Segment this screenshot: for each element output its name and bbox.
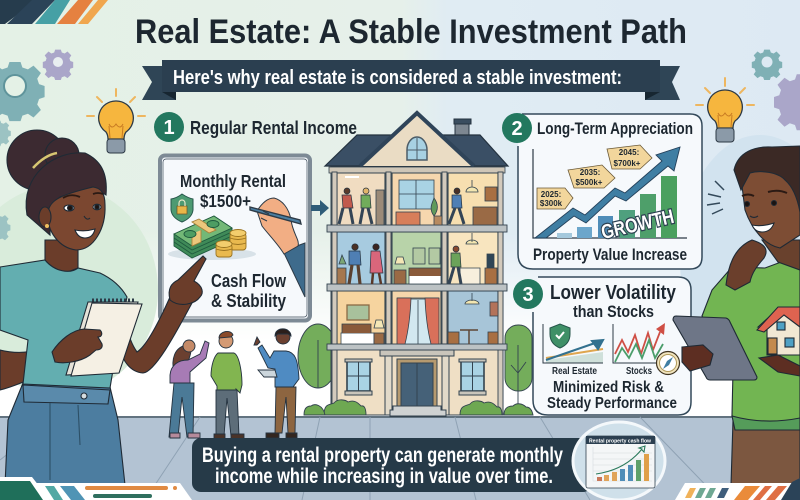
figure: woman with notepad — [0, 130, 206, 485]
cash flow badge — [573, 422, 665, 500]
number badge 2 — [502, 113, 532, 143]
panel: long-term appreciation — [502, 113, 702, 269]
cash flow text: & Stability — [211, 291, 286, 311]
floor — [0, 416, 800, 500]
number badge 1: 1 — [163, 117, 175, 139]
summary text — [202, 444, 563, 488]
hand on chin — [726, 240, 766, 290]
monthly rental text — [180, 171, 286, 211]
neck — [45, 240, 78, 275]
icon: shield — [171, 194, 193, 222]
price tag 2045 — [607, 145, 652, 169]
price tag 2035: $500k+ — [576, 178, 603, 187]
summary bar — [192, 422, 665, 500]
heading 2: Long-Term Appreciation — [537, 120, 693, 138]
icon: writing hand — [250, 198, 305, 297]
cash flow text: Cash Flow — [211, 271, 287, 291]
hair — [7, 130, 106, 235]
neck — [762, 240, 800, 270]
trousers — [731, 420, 800, 485]
house — [325, 113, 508, 416]
price tag 2025: 2025: — [541, 190, 561, 199]
banner text: Here's why real estate is considered a stable investment: — [173, 66, 622, 89]
title: Real Estate: A Stable Investment Path — [135, 13, 687, 51]
number badge 1 — [154, 112, 184, 142]
person: woman in purple — [169, 340, 209, 438]
notepad — [66, 300, 142, 376]
model house — [757, 307, 800, 355]
caption 3: Minimized Risk & — [553, 379, 664, 396]
t-shirt — [0, 260, 127, 388]
cash flow text — [211, 271, 287, 311]
residents — [339, 188, 464, 284]
bottom-left ornament — [0, 477, 192, 500]
rooms — [337, 173, 498, 344]
arrow to house — [311, 200, 329, 216]
sweater — [702, 255, 800, 430]
speech ticks — [707, 181, 724, 214]
price tag 2035 — [568, 165, 615, 188]
mini bar chart — [593, 446, 652, 481]
price tag 2045: 2045: — [619, 148, 639, 157]
growth arrow — [535, 147, 680, 238]
summary text: Buying a rental property can generate monthly — [202, 444, 563, 467]
growth label: GROWTH — [599, 206, 676, 244]
bushes — [304, 400, 533, 415]
price tag 2025: $300k — [540, 199, 563, 208]
hair — [734, 146, 800, 212]
gears left — [0, 50, 73, 242]
heading 3: Lower Volatility — [550, 282, 677, 304]
heading 3: than Stocks — [573, 302, 654, 321]
caption 2: Property Value Increase — [533, 246, 687, 264]
heading 1: Regular Rental Income — [190, 118, 357, 138]
icon: compass — [656, 352, 680, 374]
back arm — [0, 342, 70, 390]
banner — [142, 60, 680, 100]
fist — [169, 256, 206, 304]
hand on tablet — [682, 345, 713, 371]
hand on notepad — [52, 329, 102, 363]
card 3 — [533, 277, 691, 415]
real estate chart — [543, 324, 603, 363]
columns and floors — [327, 172, 507, 415]
chart labels — [552, 365, 652, 377]
facade — [327, 167, 507, 416]
chart labels: Real Estate — [552, 365, 597, 377]
price tag 2045: $700k+ — [614, 159, 641, 168]
ground floor — [345, 350, 486, 416]
cash flow badge: Rental property cash flow — [589, 438, 652, 444]
stocks chart — [613, 323, 665, 363]
backdrop circle behind man — [680, 135, 800, 385]
growth chart — [533, 145, 687, 244]
monthly rental text: $1500+ — [200, 191, 251, 211]
summary text: income while increasing in value over time. — [215, 465, 553, 488]
number badge 2: 2 — [511, 118, 523, 140]
card 1 — [160, 156, 310, 320]
panel: rental income — [154, 112, 357, 320]
card 2 — [518, 114, 702, 269]
small group of people — [169, 329, 299, 439]
backdrop circle behind woman — [0, 185, 158, 395]
number badge 3 — [513, 279, 543, 309]
price tag 2025 — [537, 188, 573, 209]
person: man in green — [211, 331, 244, 439]
hand under house — [759, 355, 800, 376]
icon: light bulb left — [87, 89, 145, 153]
price tag 2035: 2035: — [580, 168, 600, 177]
heading 3 — [550, 282, 677, 321]
pointing arm — [118, 297, 192, 373]
gears right — [752, 50, 800, 130]
jeans — [5, 383, 125, 485]
tablet — [673, 316, 757, 380]
chart labels: Stocks — [626, 365, 652, 377]
figure: man with tablet and model house — [673, 146, 800, 485]
roof — [325, 113, 508, 166]
icon: cash stack and coins — [168, 216, 256, 260]
face — [740, 153, 800, 248]
person: man in blue — [254, 329, 299, 438]
caption 3 — [547, 379, 677, 412]
panel: lower volatility — [513, 277, 691, 415]
trees behind house — [298, 324, 532, 415]
bottom-right ornament — [675, 478, 800, 500]
icon: light bulb right — [696, 78, 754, 142]
face features — [742, 191, 787, 232]
room furniture — [337, 176, 498, 344]
face — [39, 187, 105, 250]
number badge 3: 3 — [522, 284, 534, 306]
monthly rental text: Monthly Rental — [180, 171, 286, 191]
caption 3: Steady Performance — [547, 395, 677, 412]
top-left stripes — [0, 0, 108, 24]
